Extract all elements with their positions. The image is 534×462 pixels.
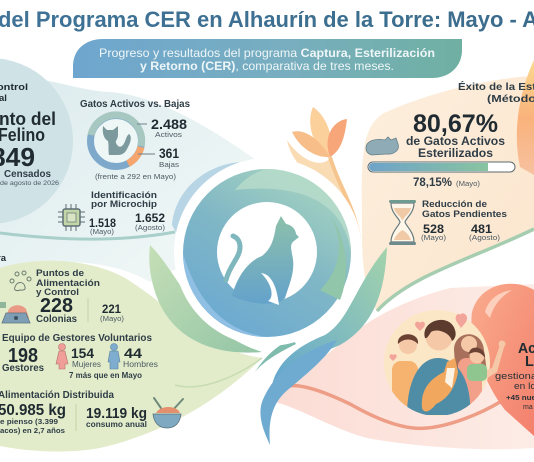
management stats: Alimentación Distribuida (0, 390, 114, 401)
icon: cat silhouette (226, 216, 299, 305)
icon: sleeping cat (366, 137, 398, 155)
central emblem: cat swirl (174, 158, 362, 346)
adoption text: gestiona (495, 371, 534, 382)
icon: woman (56, 344, 68, 369)
management stats: Gestores (2, 363, 44, 374)
census text: de agosto de 2026 (0, 180, 59, 187)
management stats: Mujeres (72, 360, 101, 369)
person: man head (424, 320, 456, 350)
subtitle banner (73, 39, 462, 78)
icon: hourglass (389, 200, 416, 245)
management stats: 19.119 kg (86, 406, 147, 422)
management stats: Equipo de Gestores Voluntarios (2, 333, 152, 344)
adoption text: en lo (514, 381, 534, 392)
census text: Censados (4, 169, 51, 180)
adoption heart (471, 284, 534, 436)
donut chart: active vs. removed cats: 2.488 (151, 117, 188, 132)
microchip stats: Identificación (91, 190, 157, 201)
management stats: y Control (36, 287, 79, 298)
adoption text: L (525, 354, 534, 370)
illustration: family with cat (384, 310, 506, 416)
donut chart: active vs. removed cats: Bajas (159, 160, 179, 169)
management stats: consumo anual (86, 420, 147, 429)
donut chart: active vs. removed cats (80, 99, 190, 181)
icon: microchip (58, 204, 85, 231)
icon: food bowl (0, 302, 30, 323)
management stats (0, 253, 183, 435)
panel: census background (0, 58, 270, 282)
person: child (467, 340, 506, 381)
management stats: 7 más que en Mayo (69, 371, 142, 380)
management stats: Alimentación (36, 278, 100, 289)
progress bar (368, 162, 515, 172)
adoption text: +45 nue (506, 393, 534, 402)
panel: sterilization background (362, 60, 534, 311)
person group: clipped figures (392, 334, 487, 415)
sterilization stats: Reducción de (422, 199, 487, 209)
sterilization stats: Esterilizados (418, 146, 493, 160)
decorative leaf: right swoosh (255, 247, 387, 445)
decorative flower (287, 107, 359, 240)
sterilization stats: (Agosto) (469, 235, 500, 242)
sterilization stats: 481 (471, 222, 492, 236)
microchip stats: 1.518 (89, 216, 116, 230)
icon: hearts (389, 313, 467, 361)
sterilization stats: de Gatos Activos (406, 134, 505, 148)
sterilization stats: 78,15% (413, 175, 452, 189)
decorative leaf: left green (149, 245, 262, 353)
person: left boy head (398, 334, 418, 354)
adoption text: ma (523, 404, 533, 411)
management stats: acos) en 2,7 años (0, 426, 65, 435)
microchip stats (58, 190, 165, 236)
management stats: Colonias (36, 314, 77, 325)
panel: management background (0, 261, 262, 452)
management stats: e pienso (3.399 (0, 417, 58, 426)
sterilization stats: 80,67% (413, 110, 498, 138)
sterilization stats: Gatos Pendientes (422, 209, 507, 219)
donut chart: active vs. removed cats: 361 (159, 146, 179, 161)
donut chart: active vs. removed cats: Gatos Activos vs. Bajas (80, 99, 190, 110)
management stats: Hombres (123, 360, 158, 369)
sterilization stats: (Método (487, 93, 534, 105)
sterilization stats: (Mayo) (456, 181, 480, 188)
management stats: 44 (124, 345, 142, 361)
management stats: 50.985 kg (0, 402, 66, 419)
sterilization stats: Éxito de la Est (458, 80, 534, 93)
icon: meal bowl (153, 398, 183, 428)
microchip stats: por Microchip (91, 199, 157, 210)
microchip stats: (Mayo) (90, 229, 114, 236)
donut chart: active vs. removed cats: Activos (155, 130, 182, 139)
subtitle banner: y Retorno (CER), comparativa de tres meses. (140, 59, 394, 73)
icon: sitting cat (103, 126, 131, 155)
person: woman head (461, 336, 477, 352)
management stats: (Mayo) (100, 314, 125, 323)
microchip stats: 1.652 (135, 211, 165, 225)
sterilization stats: (Mayo) (421, 235, 446, 242)
management stats: 198 (8, 345, 38, 367)
subtitle banner: Progreso y resultados del programa Captura, Esterilización (99, 46, 435, 60)
census text (0, 82, 59, 187)
management stats: 228 (40, 295, 73, 317)
icon: paw (10, 271, 31, 291)
census text: nto del (0, 109, 56, 129)
adoption text (495, 341, 534, 411)
sterilization stats: 528 (423, 222, 444, 236)
panel: adoption background (267, 284, 534, 449)
sterilization stats (366, 80, 534, 245)
decorative arc: outer blue crescent (172, 162, 240, 240)
management stats: 221 (102, 302, 121, 316)
icon: man (108, 344, 120, 369)
microchip stats: (Agosto) (135, 225, 165, 232)
donut chart: active vs. removed cats: (frente a 292 en Mayo) (95, 172, 177, 181)
management stats: 154 (71, 345, 94, 361)
management stats: Puntos de (36, 268, 84, 279)
